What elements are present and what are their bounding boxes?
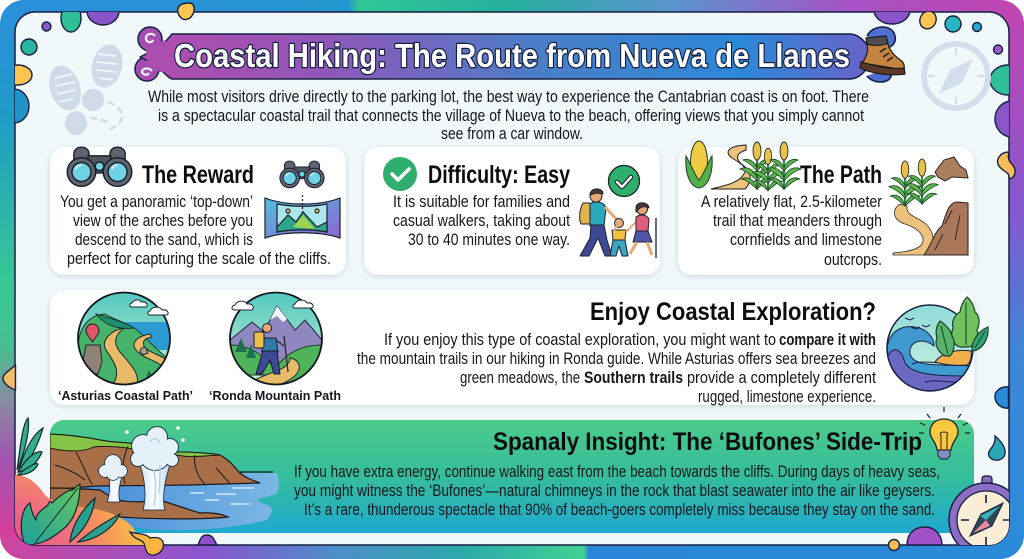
heading: spanaly insight: Spanaly Insight: The ‘Bufones’ Side-Trip bbox=[493, 428, 922, 456]
decorative border blobs bbox=[15, 12, 1009, 138]
heading: the reward: The Reward bbox=[142, 161, 254, 189]
text: exploration body: If you enjoy this type of coastal exploration, you might want to bbox=[384, 330, 776, 349]
text: exploration body: the mountain trails in our hiking in Ronda guide. While Asturias offers sea breezes and bbox=[357, 349, 876, 368]
text: path body: outcrops. bbox=[824, 250, 882, 269]
icon: corn stalks bbox=[740, 142, 801, 190]
panel: the path bbox=[678, 141, 974, 275]
image: ronda mountain path bbox=[230, 292, 322, 392]
text: reward body bbox=[60, 192, 331, 268]
title: Coastal Hiking: The Route from Nueva de Llanes bbox=[174, 37, 850, 74]
icon: panorama screen bbox=[265, 195, 340, 238]
caption: ronda: ‘Ronda Mountain Path bbox=[209, 388, 341, 403]
text: path body: cornfields and limestone bbox=[730, 230, 882, 249]
tropical leaf right bbox=[70, 498, 120, 542]
panel: enjoy coastal exploration bbox=[50, 290, 988, 406]
intro text bbox=[148, 87, 869, 143]
yellow top blob bbox=[178, 3, 194, 20]
title banner bbox=[135, 27, 895, 82]
icon: small check badge bbox=[608, 166, 640, 196]
text: exploration body: green meadows, the bbox=[460, 369, 580, 387]
text: reward body: You get a panoramic ‘top-down’ bbox=[60, 192, 253, 211]
text: reward body: perfect for capturing the scale of the cliffs. bbox=[67, 249, 331, 268]
text: path body: A relatively flat, 2.5-kilometer bbox=[701, 192, 882, 211]
heading: the path: The Path bbox=[800, 161, 882, 189]
icon: hiking boot bbox=[860, 36, 905, 75]
heading: enjoy coastal exploration: Enjoy Coastal Exploration? bbox=[590, 298, 876, 326]
icon: winding road bbox=[711, 145, 750, 189]
icon: wave and island bbox=[887, 297, 988, 392]
decorative teal droplet bbox=[988, 436, 1005, 460]
icon: lightbulb bbox=[919, 407, 970, 459]
text: difficulty body: 30 to 40 minutes one way. bbox=[408, 230, 570, 249]
text: reward body: descend to the sand, which is bbox=[75, 230, 253, 249]
panel: difficulty bbox=[364, 147, 660, 275]
text: exploration body: compare it with bbox=[779, 330, 876, 349]
text: difficulty body: It is suitable for families and bbox=[393, 192, 570, 211]
intro text: is a spectacular coastal trail that connects the village of Nueva to the beach, offering views that you simply cannot bbox=[158, 106, 864, 125]
panel: the reward bbox=[50, 147, 346, 275]
text: exploration body: Southern trails bbox=[584, 368, 683, 387]
corner foliage bbox=[15, 416, 144, 545]
text: reward body: view of the arches before you bbox=[73, 211, 253, 230]
icon: green check bbox=[383, 157, 417, 191]
icon: walking family bbox=[580, 189, 656, 258]
text: exploration body: rugged, limestone experience. bbox=[698, 387, 876, 406]
icon: binoculars bbox=[67, 147, 132, 186]
caption: asturias: ‘Asturias Coastal Path’ bbox=[58, 388, 193, 403]
icon: small binoculars bbox=[280, 161, 324, 188]
text: difficulty body bbox=[393, 192, 570, 249]
watermark: hiking footprints bbox=[44, 41, 127, 135]
text: exploration body: provide a completely different bbox=[687, 368, 876, 387]
text: difficulty body: casual walkers, taking about bbox=[393, 211, 570, 230]
text: path body: trail that meanders through bbox=[713, 211, 882, 230]
text: path body bbox=[701, 192, 882, 269]
image: asturias coastal path bbox=[78, 292, 175, 390]
icon: corner compass bbox=[948, 475, 1009, 545]
intro text: see from a car window. bbox=[441, 124, 583, 143]
icon: corn field path and cliff bbox=[889, 157, 968, 255]
decorative bottom bumps bbox=[888, 540, 900, 550]
heading: difficulty: Difficulty: Easy bbox=[428, 161, 570, 189]
tropical leaf left bbox=[21, 484, 80, 545]
palm leaves bbox=[17, 418, 43, 475]
intro text: While most visitors drive directly to the parking lot, the best way to experience the Cantabrian coast is on foot. There bbox=[148, 87, 869, 106]
right border bumps bbox=[998, 152, 1015, 179]
text: exploration body bbox=[357, 330, 876, 406]
image: geysers on cliffs bbox=[50, 426, 279, 530]
watermark: compass bbox=[924, 44, 988, 108]
yellow bottom blob bbox=[130, 532, 163, 555]
panel: spanaly insight bbox=[50, 407, 974, 533]
text: insight body bbox=[294, 462, 940, 519]
yellow left frame bump bbox=[3, 365, 16, 390]
icon: corn cob bbox=[686, 141, 712, 188]
